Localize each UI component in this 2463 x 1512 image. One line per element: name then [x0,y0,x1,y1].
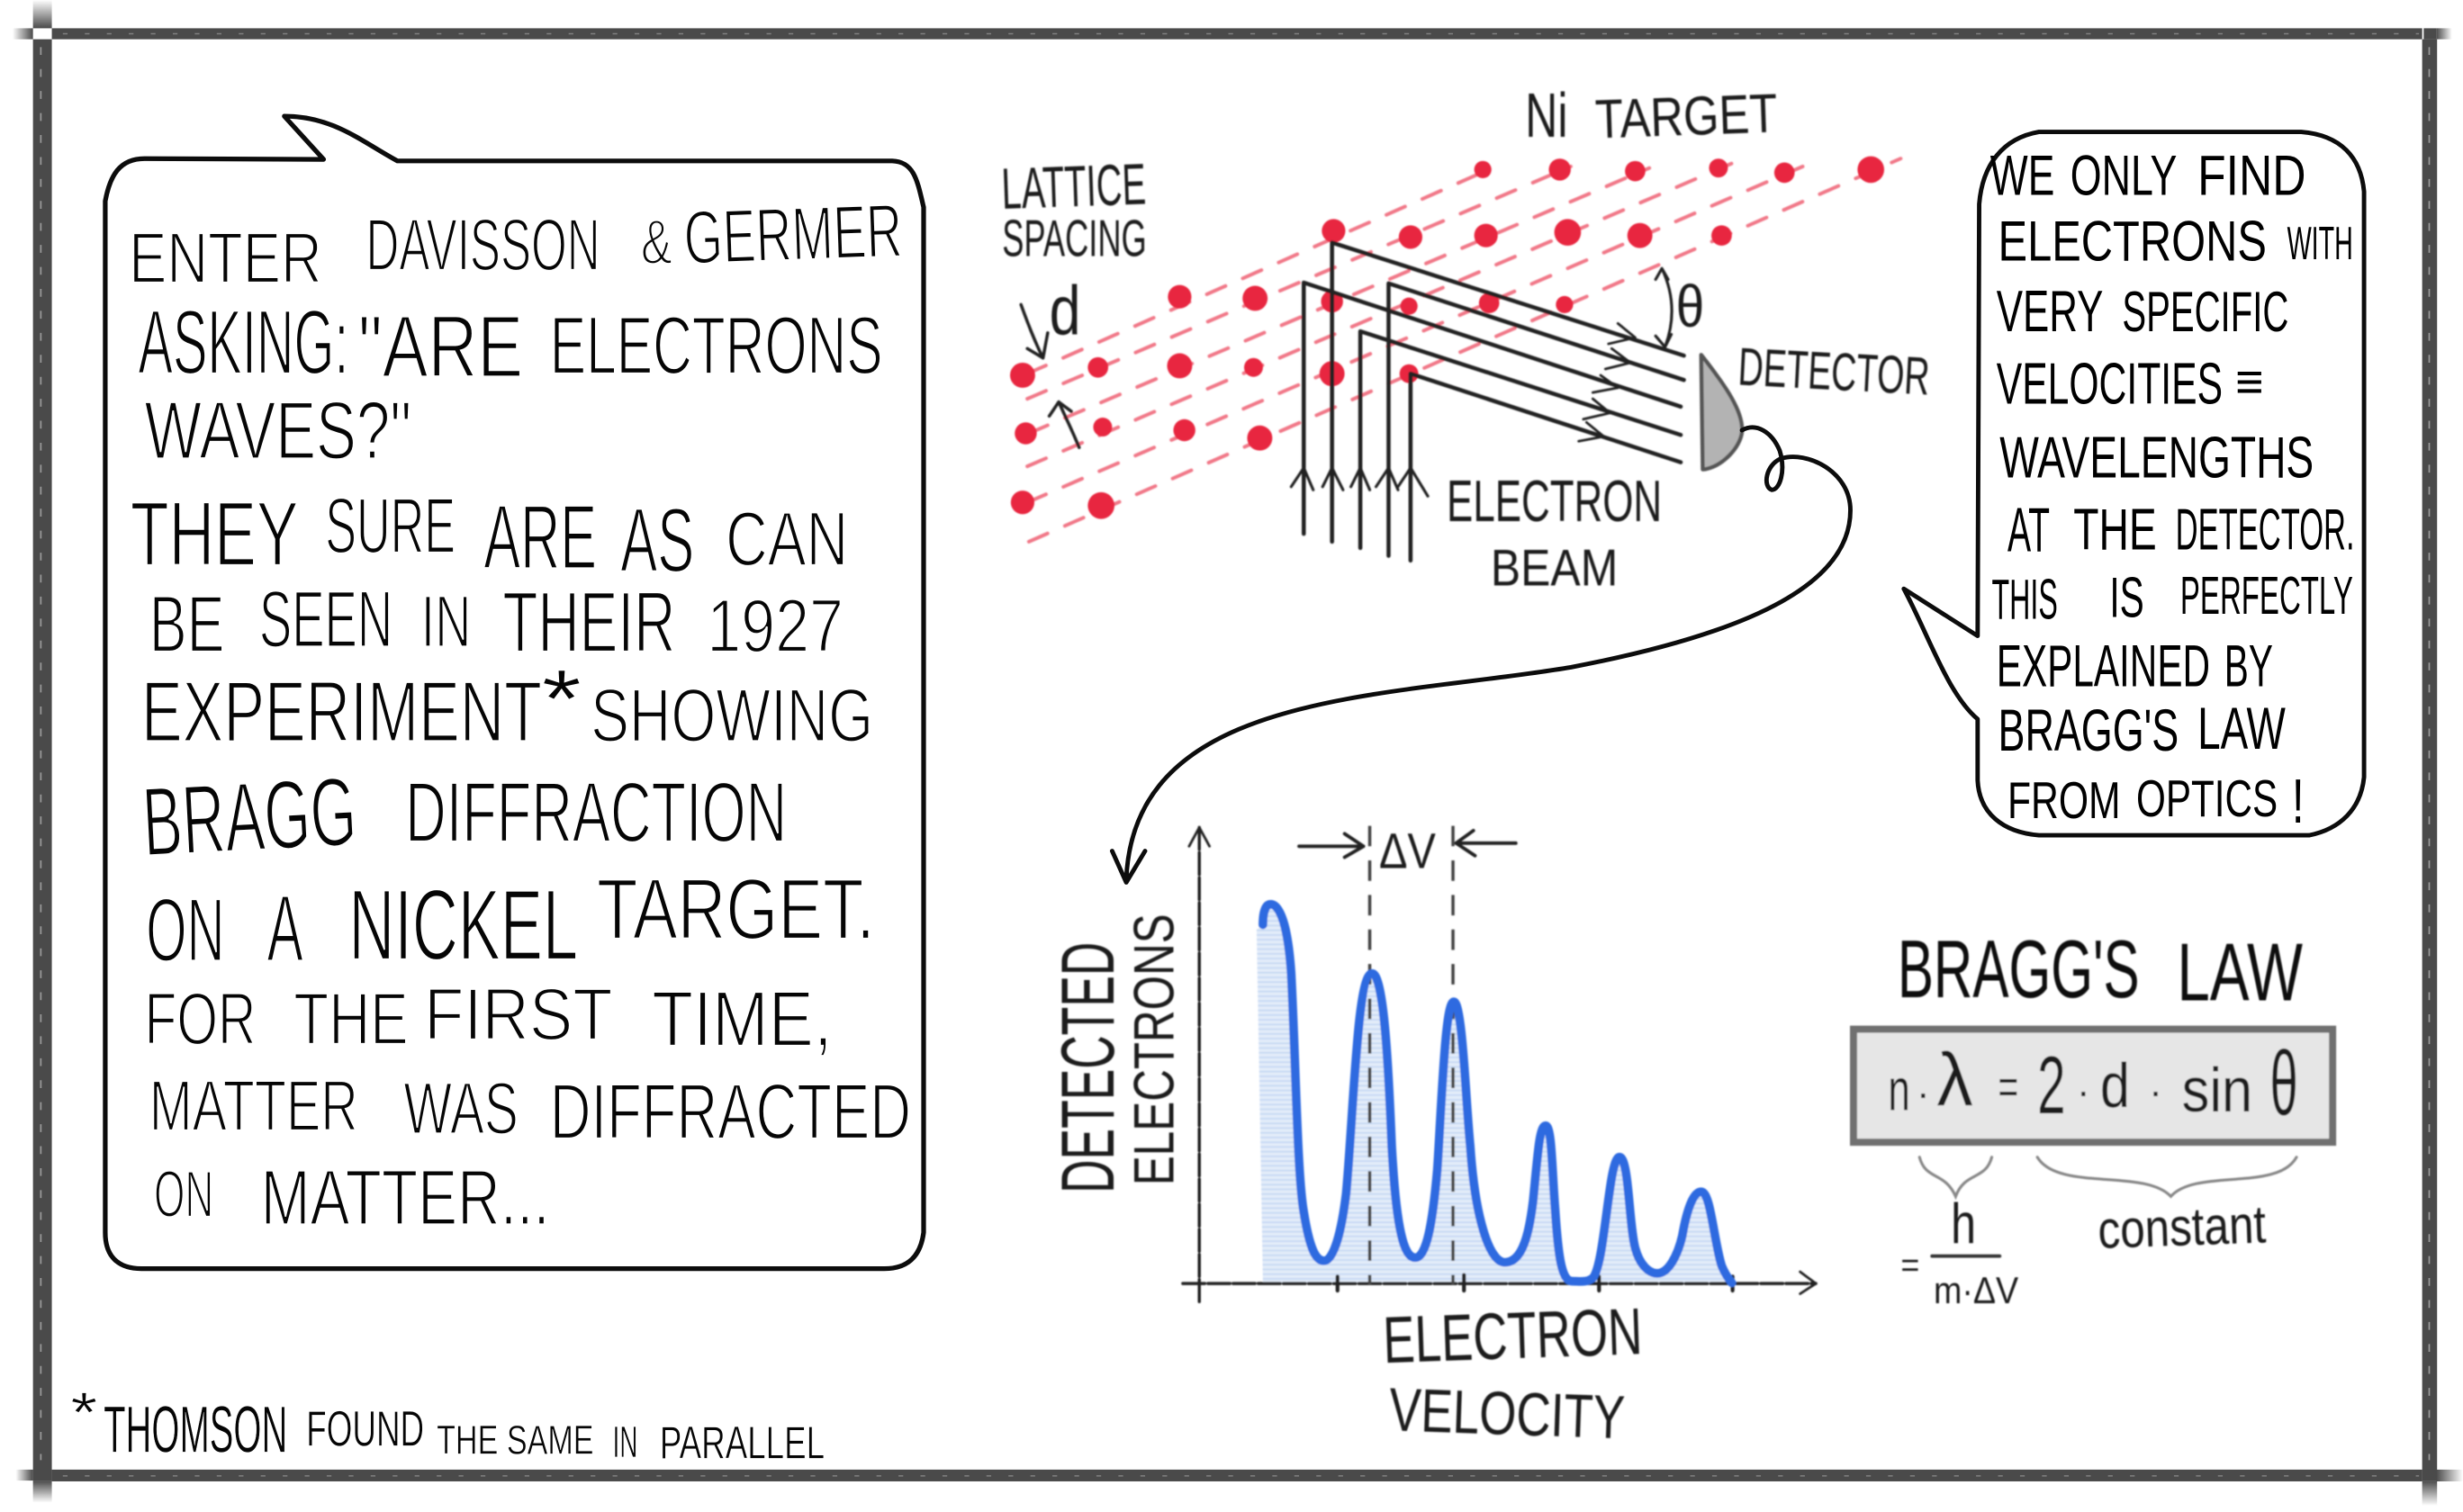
formula box: n [1888,1057,1910,1123]
bubble text: ELECTRONS [550,301,883,392]
footnote [71,1382,825,1469]
bubble text [129,188,911,1242]
bubble text: ON [146,881,225,981]
bubble text: OPTICS [2136,770,2278,828]
bubble text: BE [149,579,225,669]
label: lattice spacing [1000,151,1147,267]
area under curve [1257,904,1732,1282]
x axis label: VELOCITY [1388,1375,1626,1452]
formula box: · [1917,1070,1930,1116]
label: lattice spacing: LATTICE [1000,151,1147,221]
heading: LAW [2177,927,2303,1018]
bubble text: ONLY [2071,144,2177,207]
label: lattice distance d with arrows [1021,274,1080,447]
y axis label: ELECTRONS [1123,914,1186,1185]
brace: momentum term [1900,1157,2018,1311]
label: Ni target: Ni [1525,80,1567,150]
bubble text: TIME, [652,976,833,1063]
chart: detected electrons vs electron velocity [1045,823,1816,1452]
bubble text: MATTER... [261,1155,550,1242]
panel: Davisson and Germer speech bubble [105,116,924,1269]
footnote: IN [613,1418,637,1467]
brace: momentum term: h [1951,1193,1976,1256]
bubble text: WITH [2287,218,2353,270]
bubble text: ! [2292,766,2305,836]
bubble text: TARGET. [597,861,875,958]
bubble text: IS [2109,567,2144,630]
bubble text: A [267,877,303,982]
footnote: THOMSON [104,1393,287,1467]
brace: momentum term: m·ΔV [1934,1269,2018,1311]
electron beams [1291,243,1684,561]
bubble text [1990,144,2355,836]
footnote: PARALLEL [660,1418,825,1469]
bubble text: & [641,207,672,277]
icon: detector [1701,355,1742,470]
bubble text: * [542,654,582,745]
bubble text: AS [620,490,694,591]
arrow: detector wire to chart [1112,428,1850,882]
label: electron beam: BEAM [1491,540,1618,598]
bubble text: ARE [483,487,597,589]
bubble text: VERY [1997,279,2103,344]
bubble text: GERMER [682,188,904,280]
bubble text: BRAGG [140,757,359,877]
formula box [1854,1030,2332,1142]
bubble text: ASKING: [139,292,348,393]
bubble text: "ARE [358,298,523,396]
bubble text: FROM [2007,772,2121,830]
bubble outline [1904,132,2364,835]
bubble text: ON [154,1157,213,1231]
formula box: · [2149,1068,2162,1114]
bubble text: THE [293,978,409,1060]
label: Ni target [1525,80,1779,150]
bubble text: EXPLAINED [1997,633,2210,699]
bubble outline [105,116,924,1269]
label: electron beam [1447,469,1662,598]
formula box: sin [2182,1055,2252,1125]
delta v guides: ΔV [1379,823,1436,879]
footnote: THE SAME [437,1417,594,1462]
heading: BRAGG'S [1898,924,2140,1015]
bubble text: CAN [726,497,848,582]
bubble text: DIFFRACTED [550,1068,911,1156]
formula box: λ [1936,1037,1973,1121]
bubble text: FIND [2197,144,2306,207]
brace: constant term: constant [2097,1193,2268,1260]
bubble text: MATTER [149,1066,358,1147]
label: electron beam: ELECTRON [1447,469,1662,534]
angle marker [1656,268,1704,347]
y axis label: DETECTED [1045,942,1130,1193]
bubble text: 1927 [707,583,844,668]
bubble text: THEIR [502,574,675,670]
bubble text: ENTER [129,218,322,299]
bubble text: THEY [131,483,299,585]
bubble text: VELOCITIES [1997,351,2223,416]
label: Ni target: TARGET [1594,82,1779,150]
x axis label: ELECTRON [1382,1294,1644,1377]
bubble text: WAS [403,1068,519,1150]
footnote: FOUND [306,1400,424,1457]
bubble text: WAVELENGTHS [1999,425,2314,490]
bubble text: FOR [145,978,256,1060]
bubble text: DAVISSON [366,204,600,286]
bubble text: AT [2007,494,2050,564]
angle marker: θ [1676,274,1704,340]
formula box: = [1998,1058,2018,1114]
bubble text: LAW [2197,696,2286,762]
x axis label [1382,1294,1644,1452]
label: detector: DETECTOR [1737,336,1931,407]
y axis label [1045,914,1186,1193]
bubble text: SEEN [259,574,392,664]
delta v guides [1299,823,1516,1284]
bubble text: THE [2073,498,2157,562]
bubble text: IN [421,581,471,663]
bubble text: SPECIFIC [2122,281,2288,344]
footnote: * [71,1382,97,1444]
bubble text: EXPERIMENT [141,663,542,760]
bubble text: ≡ [2235,353,2263,410]
bubble text: BY [2224,633,2273,699]
nickel lattice [1010,157,1900,542]
label: lattice spacing: SPACING [1002,210,1147,267]
bubble text: WE [1990,144,2054,207]
formula box: · [2077,1068,2090,1114]
panel: Bragg's law formula [1854,924,2332,1311]
bubble text: DIFFRACTION [405,765,787,860]
bubble text: ELECTRONS [1998,211,2267,274]
diffraction curve [1263,904,1732,1282]
axes [1183,827,1816,1303]
formula box: θ [2269,1033,2298,1135]
bubble text: WAVES?" [145,385,411,476]
label: lattice distance d with arrows: d [1050,274,1080,350]
bubble text: SHOWING [591,672,873,757]
bubble text: SURE [325,482,456,570]
bubble text: FIRST [424,974,613,1056]
panel: Bragg's law explanation bubble [1904,132,2364,836]
bubble text: BRAGG'S [1998,698,2179,764]
formula box: 2 [2037,1040,2066,1131]
formula box: d [2100,1050,2130,1120]
brace: constant term [2037,1157,2296,1260]
bubble text: THIS [1992,568,2058,631]
bubble text: NICKEL [348,868,578,981]
diagram: electron diffraction on nickel target [1000,80,1931,598]
brace: momentum term: = [1900,1246,1919,1284]
